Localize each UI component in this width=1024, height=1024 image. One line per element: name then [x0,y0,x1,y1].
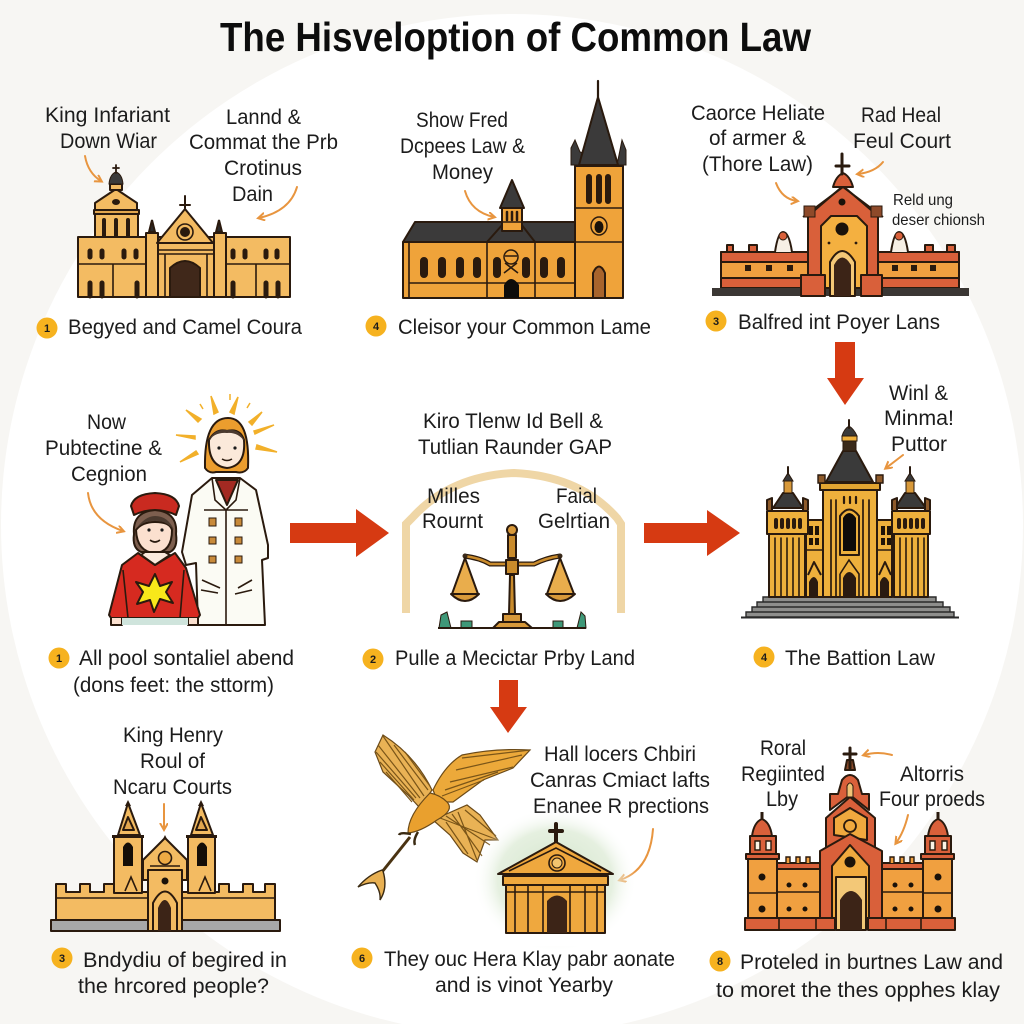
step caption 1 second row: (dons feet: the sttorm) [73,674,274,697]
icon: church with tower [403,81,626,298]
step caption 1 second row: 1 [56,653,62,665]
labels: now pubtectine: Cegnion [71,463,147,486]
labels: kiro and sides: Tutlian Raunder GAP [418,436,612,459]
labels: king and land [45,104,338,206]
labels: kiro and sides: Kiro Tlenw Id Bell & [423,410,603,433]
step caption 3: 3 [713,316,719,328]
icon: grand hall with towers [741,420,959,618]
step caption 8: Proteled in burtnes Law and [740,951,1003,974]
step caption 8: to moret the thes opphes klay [716,979,1001,1002]
labels: hall locers: Hall locers Chbiri [544,743,696,766]
icon: temple with glow [470,808,640,952]
labels: king henry: Roul of [140,750,205,773]
arrow: pointer to lantern [465,191,494,217]
arrow: down to bird [490,680,527,733]
labels: hall locers: Canras Cmiact lafts [530,769,710,792]
labels: king and land: King Infariant [45,104,170,127]
labels: caorce and rad heal: Rad Heal [861,104,941,127]
labels: hall locers [530,743,710,818]
decorative arch with scale labels: Rournt [422,510,483,533]
panel: bird and temple [352,735,710,997]
labels: king and land: Lannd & [226,106,301,129]
step caption 2: Pulle a Mecictar Prby Land [395,647,635,670]
step caption 2: 2 [370,654,376,666]
step caption 6: 6 [359,953,365,965]
labels: king henry [113,724,232,799]
labels: king and land: Commat the Prb [189,131,338,154]
step caption 6: and is vinot Yearby [435,974,614,997]
labels: now pubtectine [45,411,162,486]
step caption 3 third row: the hrcored people? [78,975,269,998]
step caption 6: They ouc Hera Klay pabr aonate [384,948,675,971]
arrow: down to grand hall [827,342,864,405]
decorative arch with scale labels [406,473,621,613]
arrows: pointers to building [85,156,297,218]
icon: golden bird [358,735,530,900]
step caption 1: Begyed and Camel Coura [68,316,302,339]
panel: people [45,394,294,697]
icon: palace building [78,165,290,297]
step caption 4: Cleisor your Common Lame [398,316,651,339]
labels: caorce and rad heal: of armer & [709,127,806,150]
panel: top right fortress chapel [691,102,985,334]
arrow: pointer down to castle [163,804,165,829]
labels: winl: Puttor [891,433,947,456]
decorative arch with scale labels: Faial [556,485,597,508]
panel: top left building [36,104,338,339]
arrow: pointer to child [88,493,123,531]
arrows: pointers to chapel [776,162,883,201]
panel: bottom right cathedral [710,737,1003,1002]
labels: king henry: King Henry [123,724,223,747]
icon: red cathedral [745,748,955,930]
labels: caorce and rad heal: Feul Court [853,130,951,153]
labels: king and land: Down Wiar [60,130,157,153]
labels: show fred: Dcpees Law & [400,135,525,158]
labels: winl: Minma! [884,407,954,430]
labels: caorce and rad heal: (Thore Law) [702,153,813,176]
labels: winl [884,382,954,456]
labels: caorce and rad heal [691,102,985,229]
labels: roral and altorris: Lby [766,788,798,811]
step caption 8: 8 [717,956,723,968]
panel: bottom left castle [51,724,287,998]
step caption 3 third row: 3 [59,953,65,965]
step caption 6 [352,948,675,997]
labels: caorce and rad heal: Reld ung [893,192,953,209]
labels: roral and altorris: Regiinted [741,763,825,786]
labels: caorce and rad heal: deser chionsh [892,212,985,229]
step caption 4: 4 [373,321,380,333]
step caption 1 second row: All pool sontaliel abend [79,647,294,670]
labels: kiro and sides [418,410,612,459]
labels: roral and altorris: Four proeds [879,788,985,811]
decorative arch with scale labels: Milles [427,485,480,508]
labels: hall locers: Enanee R prections [533,795,709,818]
step caption 8 [710,950,1003,1002]
labels: now pubtectine: Pubtectine & [45,437,162,460]
step caption 3: Balfred int Poyer Lans [738,311,940,334]
icon: woman in white coat with halo [176,394,277,625]
icon: child in red sweater [109,493,200,625]
labels: king and land: Crotinus [224,157,302,180]
arrow: pointer to roof [886,455,903,468]
labels: now pubtectine: Now [87,411,127,434]
arrow: people to scales [290,509,389,557]
labels: roral and altorris: Altorris [900,763,964,786]
labels: show fred: Money [432,161,493,184]
labels: show fred: Show Fred [416,109,508,132]
step caption 3 third row: Bndydiu of begired in [83,949,287,972]
labels: caorce and rad heal: Caorce Heliate [691,102,825,125]
step caption 3 third row [52,948,287,998]
icon: walled castle [51,800,280,931]
arrow: pointer to temple [620,829,653,880]
icon: balance scale [438,525,586,628]
icon: red chapel with walls [712,154,969,296]
arrow: scales to grand hall [644,510,740,556]
labels: king henry: Ncaru Courts [113,776,232,799]
panel: grand hall [741,382,959,670]
panel: scales of justice [362,410,635,670]
labels: roral and altorris: Roral [760,737,806,760]
step caption 1 second row [48,647,294,697]
panel: top centre church [366,81,651,339]
arrows: pointers to cathedral [864,753,908,843]
decorative arch with scale labels: Gelrtian [538,510,610,533]
step caption 1: 1 [44,323,50,335]
labels: winl: Winl & [889,382,948,405]
step caption 4 second row: The Battion Law [785,647,936,670]
labels: show fred [400,109,525,184]
step caption 4 second row: 4 [761,652,768,664]
labels: king and land: Dain [232,183,273,206]
labels: roral and altorris [741,737,985,811]
title: The Hisveloption of Common Law [220,14,811,60]
